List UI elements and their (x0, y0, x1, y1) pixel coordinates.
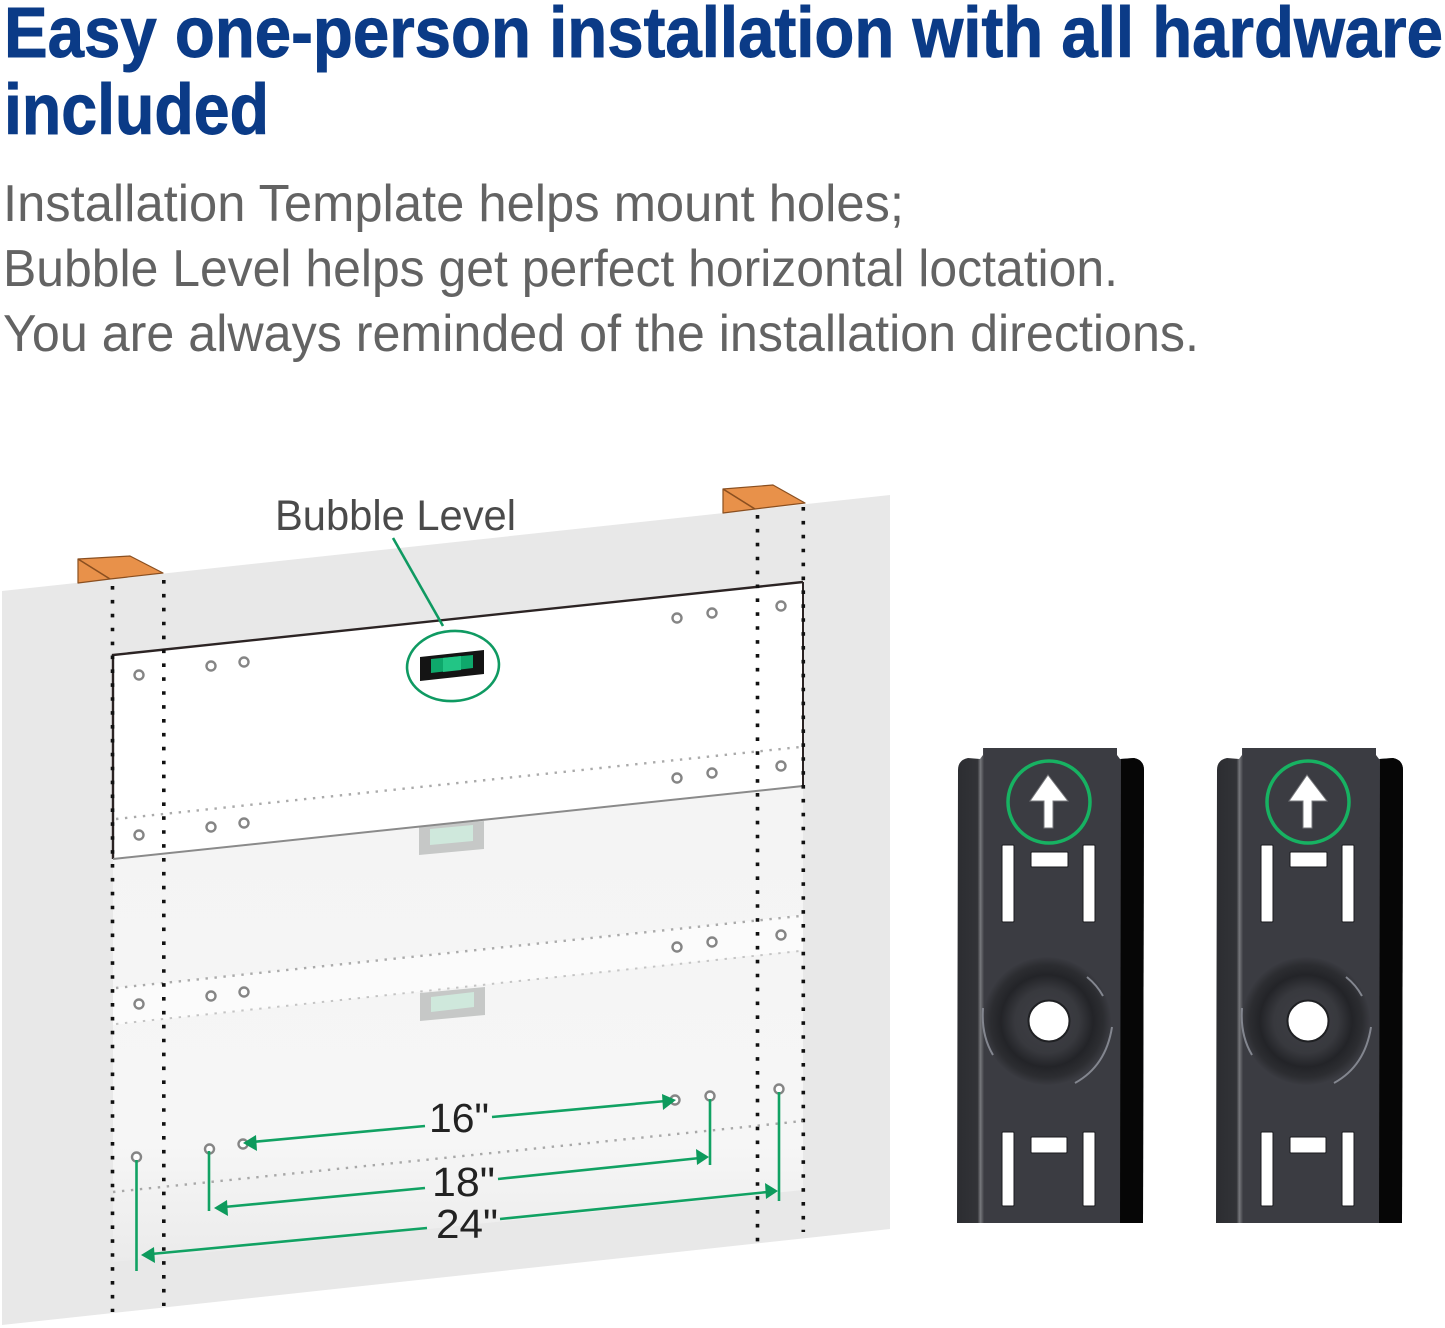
dimension 24 inch: 24" (436, 1201, 498, 1247)
bracket left (957, 748, 1144, 1223)
wall stud left (78, 556, 163, 583)
dimension 16 inch (243, 1094, 676, 1151)
wall (2, 495, 890, 1325)
dimension 24 inch (136, 1092, 779, 1271)
description text: Installation Template helps mount holes; (3, 175, 904, 233)
dimension 16 inch: 16" (429, 1095, 489, 1141)
ghost template position 2 (113, 915, 803, 1025)
top arrow (1289, 775, 1327, 828)
bubble level (420, 650, 484, 681)
dimension 18 inch (209, 1099, 710, 1216)
direction highlight ring (1267, 761, 1349, 843)
stud dotted lines (112, 507, 803, 1312)
bracket right (1216, 748, 1403, 1223)
bubble level label: Bubble Level (275, 492, 516, 540)
title (4, 0, 1443, 150)
description text: You are always reminded of the installation directions. (3, 305, 1199, 363)
description text: Bubble Level helps get perfect horizontal loctation. (3, 240, 1118, 298)
top arrow (1030, 775, 1068, 828)
mounting holes (132, 602, 786, 1162)
direction highlight ring (1008, 761, 1090, 843)
dimension 18 inch: 18" (432, 1159, 495, 1205)
bubble level leader line (393, 538, 443, 626)
title: included (4, 71, 269, 150)
ghost level position 2 (419, 821, 484, 855)
description text (3, 175, 1199, 363)
bubble level highlight ring (405, 628, 501, 704)
wall stud right (723, 485, 805, 513)
template panel (113, 582, 803, 859)
mounting row dotted line (113, 1121, 803, 1192)
